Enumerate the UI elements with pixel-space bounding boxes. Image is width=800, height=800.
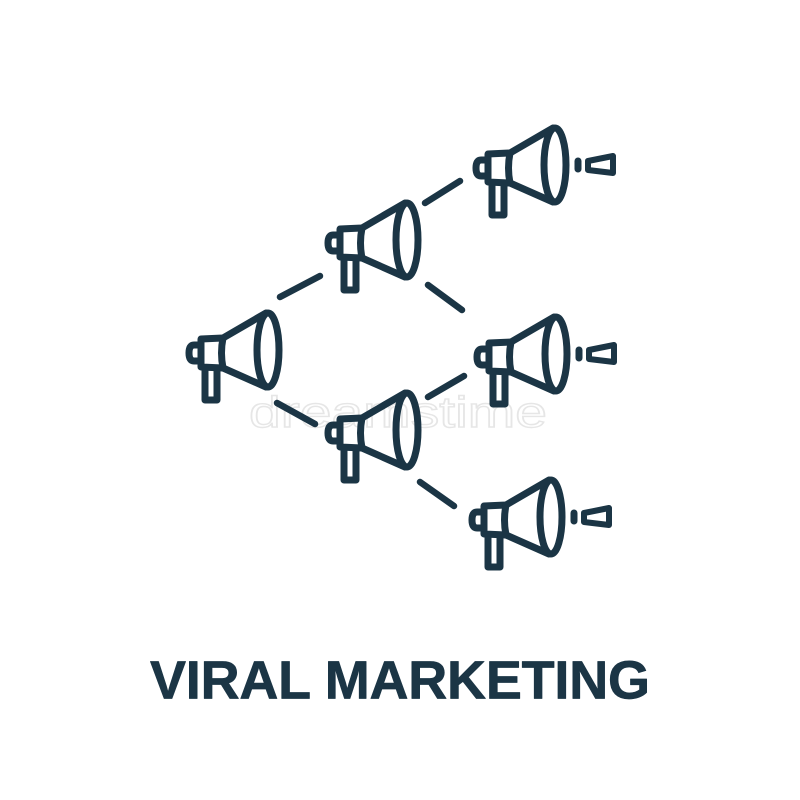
connector dashes between megaphones <box>277 181 464 506</box>
icon: lower middle megaphone <box>328 393 418 480</box>
icon: upper middle megaphone <box>328 203 418 290</box>
icon: bottom right megaphone with sound wave <box>472 480 609 567</box>
icon: root megaphone <box>189 313 279 400</box>
title: VIRAL MARKETING <box>150 650 650 710</box>
icon: top right megaphone with sound wave <box>476 128 613 215</box>
watermark: dreamstime <box>249 388 547 437</box>
icon: center right megaphone with sound wave <box>477 317 614 404</box>
